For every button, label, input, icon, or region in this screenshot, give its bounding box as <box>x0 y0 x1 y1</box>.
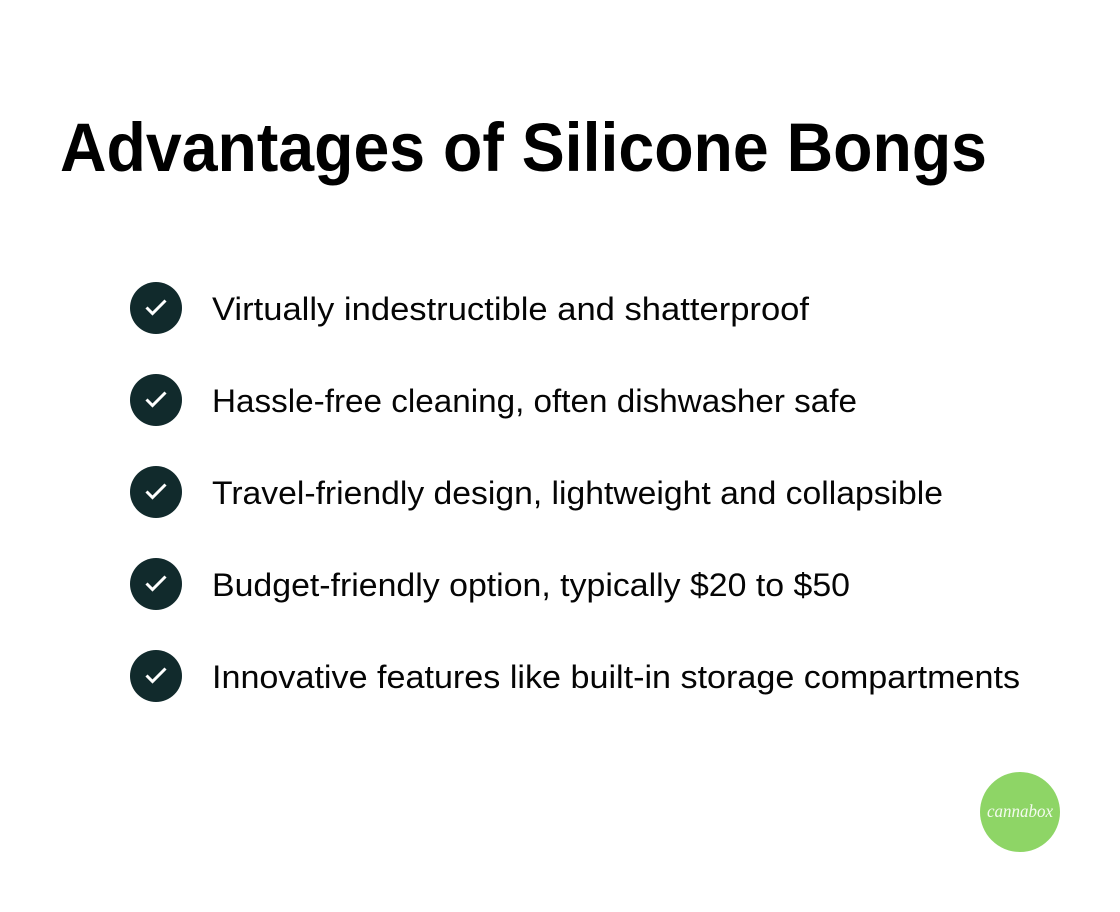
icon: check badge <box>130 558 182 610</box>
list of advantages <box>130 282 1020 702</box>
item 1: shatterproof <box>130 282 809 334</box>
logo wordmark: cannabox <box>987 801 1053 821</box>
item text: Hassle-free cleaning, often dishwasher safe <box>212 383 857 419</box>
icon: check badge <box>130 282 182 334</box>
title: Advantages of Silicone Bongs <box>60 109 987 186</box>
item 3: travel <box>130 466 943 518</box>
logo: cannabox badge <box>980 772 1060 852</box>
item text: Virtually indestructible and shatterproof <box>212 291 809 327</box>
item 5: features <box>130 650 1020 702</box>
item text: Travel-friendly design, lightweight and collapsible <box>212 475 943 511</box>
icon: check badge <box>130 374 182 426</box>
item text: Innovative features like built-in storage compartments <box>212 659 1020 695</box>
item 2: cleaning <box>130 374 857 426</box>
item text: Budget-friendly option, typically $20 to $50 <box>212 567 850 603</box>
icon: check badge <box>130 650 182 702</box>
item 4: budget <box>130 558 850 610</box>
icon: check badge <box>130 466 182 518</box>
